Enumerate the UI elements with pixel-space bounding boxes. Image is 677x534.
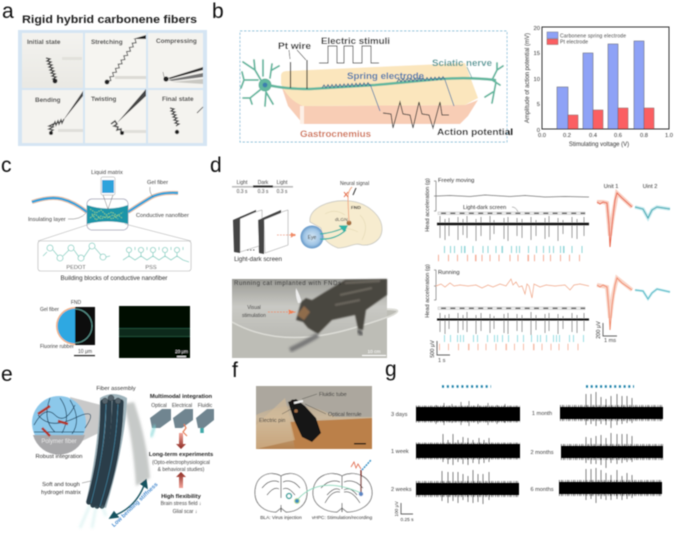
conductive nanofiber label: Conductive nanofiber xyxy=(136,213,189,219)
running label: Running xyxy=(438,270,460,276)
modality labels: Fluidic xyxy=(198,403,213,409)
recording scale: 0.25 s xyxy=(400,517,414,523)
modality labels: Optical xyxy=(151,403,167,409)
panel f: mouse implant xyxy=(232,359,372,521)
bars: Pt electrode xyxy=(568,108,654,129)
time and voltage scale: 500 μV xyxy=(430,340,436,358)
building blocks caption: Building blocks of conductive nanofiber xyxy=(61,275,167,282)
PSS structure xyxy=(123,247,189,262)
label c: c xyxy=(1,154,12,177)
PSS label: PSS xyxy=(145,265,157,271)
recording scale: 100 μV xyxy=(394,501,400,517)
panel g: long-term recordings xyxy=(385,358,663,523)
x axis ticks: 0.0 xyxy=(538,133,546,139)
plot frame xyxy=(542,27,669,129)
acceleration trace xyxy=(436,195,589,197)
photo: twisting: Twisting xyxy=(91,96,117,103)
light dark timing xyxy=(232,180,293,195)
BLA caption: BLA: Virus injection xyxy=(260,515,302,521)
vHPC caption: vHPC: Stimulation/recording xyxy=(312,515,372,521)
y axis ticks: 5 xyxy=(537,102,540,108)
fiber tip glow xyxy=(80,505,106,528)
hydrogel matrix label second line: hydrogel matrix xyxy=(41,490,81,496)
building blocks box xyxy=(38,241,191,271)
label d: d xyxy=(210,154,222,177)
recording: 6 months xyxy=(530,468,662,503)
photo: initial state xyxy=(22,33,83,88)
magnified network xyxy=(32,396,91,455)
recording: 1 month xyxy=(532,392,663,428)
modality icon: fluidic xyxy=(196,409,214,433)
FND label: FND xyxy=(71,300,82,306)
recording: 1 week xyxy=(391,434,520,465)
high flexibility heading: High flexibility xyxy=(161,494,202,500)
electrical recording squiggle xyxy=(351,462,361,469)
legend: Carbonene spring electrode xyxy=(560,34,626,40)
sciatic nerve label: Sciatic nerve xyxy=(432,58,492,69)
scale bar 10 cm xyxy=(362,349,386,356)
label e: e xyxy=(1,363,13,386)
x axis ticks xyxy=(538,133,673,139)
zoom wedge xyxy=(70,397,101,442)
spring electrode coils xyxy=(322,77,445,88)
unit waveforms xyxy=(596,184,670,344)
optic pathway arrows xyxy=(320,226,347,239)
modality labels: Electrical xyxy=(172,403,192,409)
unit 1 freely moving waveform xyxy=(597,193,632,247)
x axis title: Stimulating voltage (V) xyxy=(569,142,629,148)
bundle tops xyxy=(102,395,121,404)
recording: 3 days xyxy=(391,401,520,426)
bending arrow xyxy=(110,480,147,518)
optical ferrule label: Optical ferrule xyxy=(328,412,362,418)
spike raster unit 2 xyxy=(439,344,584,350)
light-dark screen label: Light-dark screen xyxy=(234,256,282,263)
bars: carbonene spring electrode xyxy=(557,41,644,129)
y axis ticks: 20 xyxy=(534,26,540,32)
x axis ticks: 1.0 xyxy=(665,133,673,139)
unit 1 label: Unit 1 xyxy=(604,184,618,190)
cross mark xyxy=(344,192,348,197)
action potential trace xyxy=(383,102,449,128)
legend xyxy=(547,32,626,46)
unit 2 label: Uint 2 xyxy=(643,184,657,190)
brain section vHPC xyxy=(313,474,372,512)
freely moving label: Freely moving xyxy=(438,178,474,184)
light-dark screen label: Light-dark screen xyxy=(463,205,506,211)
recording: 1 month: 1 month xyxy=(532,411,552,417)
x axis ticks: 0.6 xyxy=(614,133,622,139)
dashed arrow to eye xyxy=(277,233,296,237)
robust integration label: Robust integration xyxy=(35,454,83,460)
FND fiber xyxy=(348,187,352,222)
screen bar xyxy=(438,307,585,310)
recording: 2 weeks: 2 weeks xyxy=(391,487,412,493)
electric pin pointer xyxy=(282,408,293,414)
recording: 2 weeks xyxy=(391,470,519,504)
x axis ticks: 0.2 xyxy=(563,133,571,139)
dashed frame xyxy=(240,31,507,142)
waveform scale xyxy=(596,321,617,344)
magnifier outline xyxy=(87,199,128,230)
unit 2 running waveform xyxy=(635,289,670,299)
glial scar text: Glial scar ↓ xyxy=(173,509,197,515)
hydrogel matrix label: Soft and tough xyxy=(42,482,80,488)
label g: g xyxy=(385,358,397,381)
optical ferrule pointer xyxy=(305,404,326,414)
fiber cross-section image xyxy=(56,307,95,345)
neuron and sciatic nerve xyxy=(241,60,503,106)
cat photo title: Running cat implanted with FNDs xyxy=(234,280,341,287)
photo grid frame xyxy=(18,30,207,146)
unit 2 freely moving waveform xyxy=(635,207,670,218)
panel b: spring electrode schematic xyxy=(212,0,513,142)
projection curve xyxy=(298,485,361,499)
insulating layer pointer xyxy=(68,213,86,219)
waveform scale: 200 μV xyxy=(596,321,602,339)
modality icon: electrical xyxy=(173,409,193,436)
label a: a xyxy=(2,0,14,23)
neural signal spikes xyxy=(440,216,584,241)
low bending stiffness label: Low bending stiffness xyxy=(111,482,159,529)
cat brain xyxy=(310,201,382,248)
legend: Pt electrode xyxy=(560,40,588,46)
photo: compressing: Compressing xyxy=(156,38,197,45)
freely moving axis xyxy=(434,181,436,211)
hydrogel pointer xyxy=(82,481,91,483)
visual stimulation label: Visual xyxy=(247,305,261,311)
multimodal integration heading: Multimodal integration xyxy=(150,394,213,400)
screen bar xyxy=(438,212,585,214)
label f: f xyxy=(232,359,238,382)
photo: twisting xyxy=(85,89,146,143)
neural signal baseline xyxy=(437,223,589,225)
mouse photo xyxy=(256,386,372,449)
stim marks left xyxy=(442,385,491,388)
red arrow down xyxy=(176,433,186,449)
spike raster unit 1 xyxy=(444,335,586,342)
photo: compressing xyxy=(148,33,203,88)
photo: bending xyxy=(22,90,83,143)
cat photo xyxy=(232,279,398,358)
brain section BLA xyxy=(255,474,307,512)
long-term text: (Opto-electrophysiological xyxy=(152,460,210,466)
recording: 3 days: 3 days xyxy=(391,412,408,418)
gel fiber pointer xyxy=(150,187,153,197)
syringe of liquid matrix xyxy=(101,177,115,209)
time and voltage scale: 1 s xyxy=(438,358,446,364)
head acceleration title: Head acceleration (g) xyxy=(425,178,431,232)
light dark timing: 0.3 s xyxy=(277,189,288,195)
longitudinal fluorescence image: 20 μm xyxy=(175,349,188,354)
bundle fibers xyxy=(89,402,121,506)
acceleration trace xyxy=(436,279,589,298)
zoom-in lines xyxy=(38,224,191,241)
panel d: cat visual stimulation xyxy=(210,154,670,364)
x axis ticks: 0.4 xyxy=(589,133,598,139)
gel fiber core xyxy=(32,193,178,212)
photo: initial state: Initial state xyxy=(27,39,61,46)
sciatic nerve pointer xyxy=(467,67,472,78)
panel e: multimodal hydrogel fiber assembly xyxy=(1,363,214,529)
photo: stretching: Stretching xyxy=(91,39,123,46)
optical fiber stimulus xyxy=(362,460,371,470)
longitudinal fluorescence image xyxy=(119,306,190,358)
recording: 2 months xyxy=(530,433,663,468)
conductive block xyxy=(87,205,128,224)
recording site xyxy=(359,492,363,496)
title a: Rigid hybrid carbonene fibers xyxy=(22,14,197,26)
electric stimuli label: Electric stimuli xyxy=(321,36,390,47)
Pt wire pointers xyxy=(289,50,306,60)
gastrocnemius label: Gastrocnemius xyxy=(300,129,371,140)
action potential label: Action potential xyxy=(437,127,513,138)
neural signal label: Neural signal xyxy=(340,181,369,187)
y axis ticks: 15 xyxy=(534,51,540,57)
light dark timing: Light xyxy=(277,180,288,186)
gel fiber label: Gel fiber xyxy=(147,180,168,186)
label b: b xyxy=(212,0,224,23)
recording: 6 months: 6 months xyxy=(530,487,554,493)
red arrow up xyxy=(176,472,186,488)
visual stimulation label second line: stimulation xyxy=(242,313,266,319)
fluidic tube pointer xyxy=(302,394,317,399)
recording electrode xyxy=(360,470,362,494)
PEDOT label: PEDOT xyxy=(66,265,86,271)
light dark timing: 0.3 s xyxy=(237,189,248,195)
insulating layer label: Insulating layer xyxy=(28,217,66,223)
brain folds xyxy=(325,211,366,240)
fluorine rubber label: Fluorine rubber xyxy=(40,344,74,350)
recording: 1 week: 1 week xyxy=(391,449,409,455)
eye xyxy=(300,226,324,248)
scale bar 10 um: 10 μm xyxy=(78,349,92,355)
spike raster unit 2 xyxy=(438,255,586,261)
photo: bending: Bending xyxy=(35,97,61,104)
long-term text second line: & behavioral studies) xyxy=(158,467,205,473)
PEDOT structure xyxy=(43,243,110,261)
recording: 2 months: 2 months xyxy=(530,450,554,456)
polymer fiber label: Polymer fiber xyxy=(41,439,77,445)
light dark timing: Dark xyxy=(258,180,269,186)
spike raster unit 1 xyxy=(444,246,586,253)
gel fiber small label: Gel fiber xyxy=(40,307,59,313)
ghost bundle xyxy=(124,402,150,486)
y axis ticks xyxy=(534,26,540,134)
gastrocnemius muscle xyxy=(281,63,478,124)
neural signal spikes xyxy=(440,312,584,335)
electric pin label: Electric pin xyxy=(259,418,285,424)
long-term experiments heading: Long-term experiments xyxy=(149,452,213,458)
eye label: Eye xyxy=(308,235,317,241)
freely moving recording xyxy=(425,178,589,258)
fiber assembly label: Fiber assembly xyxy=(96,386,136,392)
neuron soma xyxy=(258,78,272,92)
Pt wire label: Pt wire xyxy=(278,41,311,52)
recording scale xyxy=(394,501,414,523)
y axis title: Amplitude of action potential (mV) xyxy=(525,33,531,123)
x axis ticks: 0.8 xyxy=(640,133,648,139)
virus injection site xyxy=(286,494,300,504)
dLGN site xyxy=(346,220,352,226)
waveform scale: 1 ms xyxy=(604,338,616,344)
gel fiber xyxy=(32,193,178,212)
modality labels xyxy=(151,403,213,409)
fluidic tube label: Fluidic tube xyxy=(319,392,347,398)
spring electrode label: Spring electrode xyxy=(347,71,424,82)
running recording xyxy=(425,264,589,364)
panel c: conductive nanofiber xyxy=(1,154,191,358)
y axis ticks: 10 xyxy=(534,77,540,83)
stim marks right xyxy=(586,385,634,388)
spring electrode leads xyxy=(370,80,454,111)
light-dark screens xyxy=(233,210,288,254)
photo: stretching xyxy=(85,33,146,88)
running axis xyxy=(434,270,436,300)
light dark timing: Light xyxy=(237,180,248,186)
stimulus pulses xyxy=(319,46,379,63)
visual stimulation arrow xyxy=(268,310,295,314)
head acceleration title: Head acceleration (g) xyxy=(425,264,431,318)
bundle glow xyxy=(86,394,127,508)
FND label in brain: FND xyxy=(351,205,361,211)
scale bar 10 cm: 10 cm xyxy=(367,349,381,355)
screen pointer xyxy=(512,207,518,212)
panel a: rigid hybrid carbonene fibers xyxy=(2,0,207,146)
light dark timing: 0.3 s xyxy=(258,189,269,195)
liquid matrix label: Liquid matrix xyxy=(91,170,123,176)
Pt wires xyxy=(290,60,307,89)
signal arrow xyxy=(353,188,356,195)
photo: final state xyxy=(148,90,203,143)
y axis ticks: 0 xyxy=(537,128,540,134)
scale bar 10 um xyxy=(74,349,95,356)
neural signal baseline xyxy=(437,318,589,320)
time and voltage scale xyxy=(430,340,450,364)
unit 1 running waveform xyxy=(597,278,632,330)
dLGN label: dLGN xyxy=(335,217,348,223)
photo: final state: Final state xyxy=(162,96,194,103)
brain stress text: Brain stress field ↓ xyxy=(161,501,201,507)
bar chart: amplitude of action potential xyxy=(525,26,673,148)
modality icon: optical xyxy=(150,409,171,437)
